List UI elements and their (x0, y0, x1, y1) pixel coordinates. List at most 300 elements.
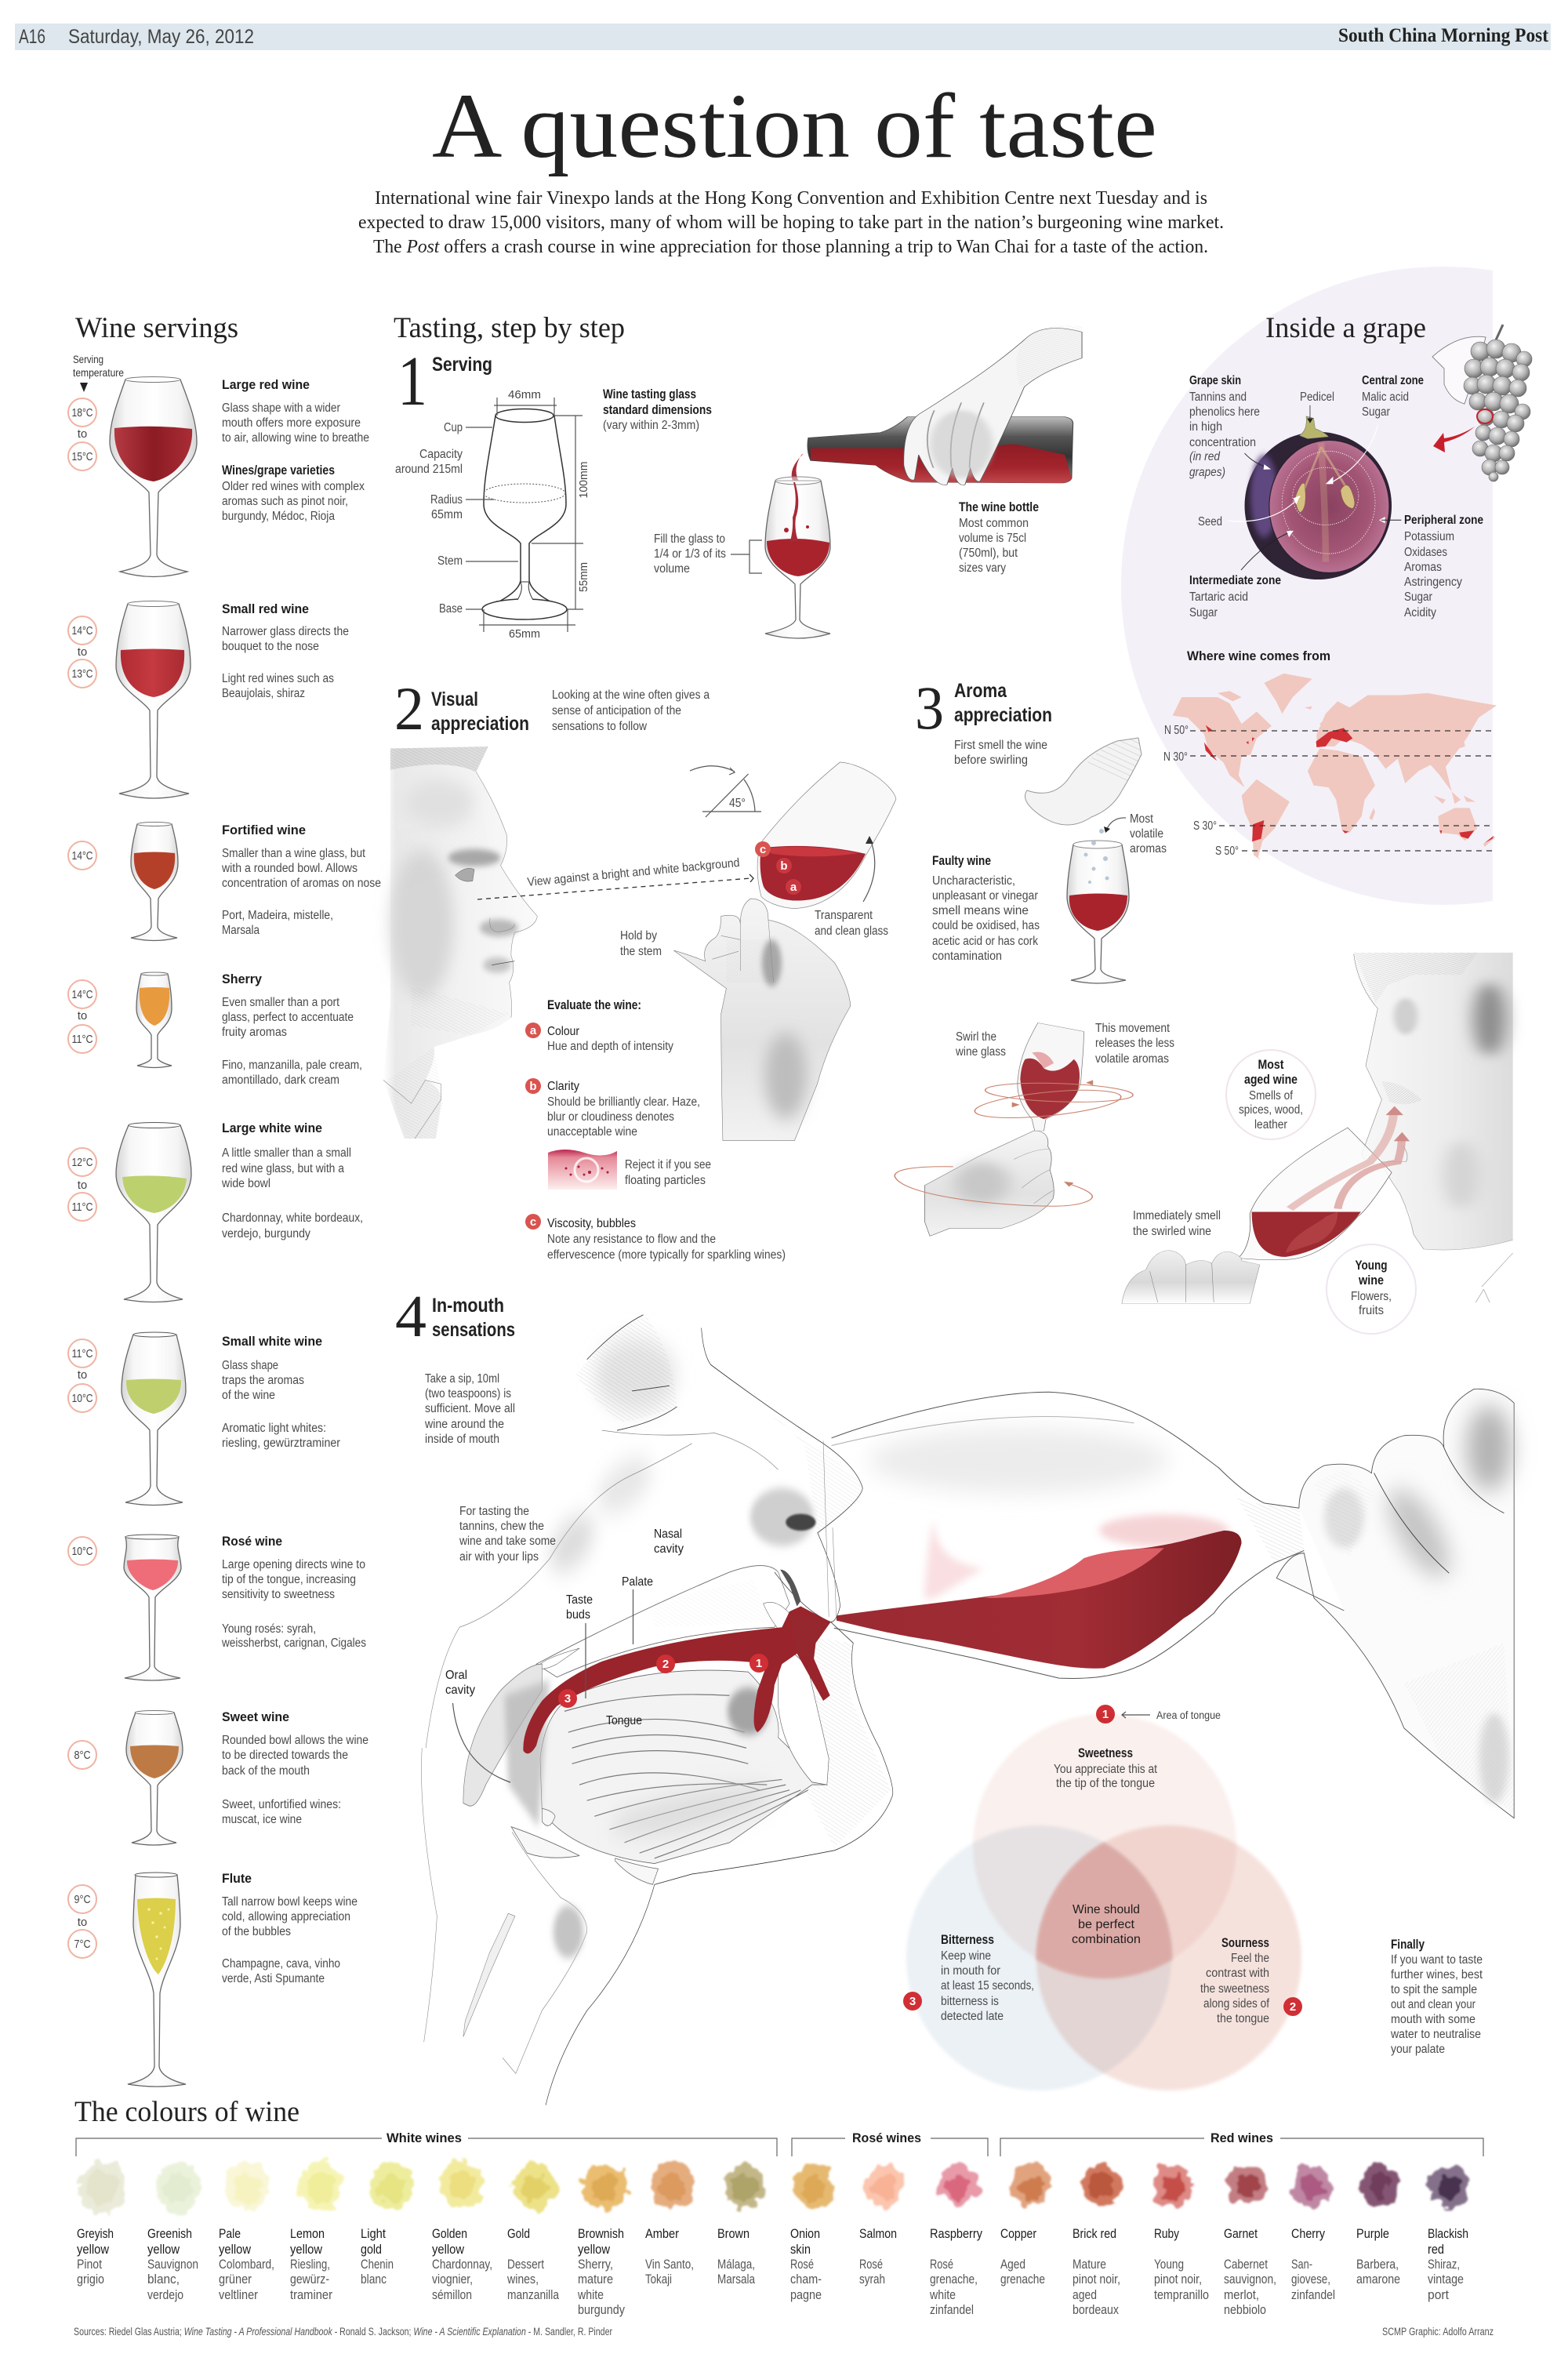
anatomy labels: Tongue (606, 1714, 642, 1727)
floating particles swatch (548, 1150, 617, 1190)
glass dimensions diagram: 46mm (508, 388, 541, 401)
serving: fortified wine: Smaller than a wine glass, but (222, 847, 366, 860)
venn text: sourness: the tongue (1217, 2012, 1269, 2025)
heading: wine servings: Wine servings (75, 312, 238, 344)
mouth number markers: 2 (662, 1658, 669, 1671)
evaluate the wine list: effervescence (more typically for sparkling wines) (547, 1248, 786, 1262)
serving: small red wine: Beaujolais, shiraz (222, 687, 305, 700)
illustration: swirling glass and hand (895, 1023, 1134, 1236)
serving: fortified wine (68, 822, 381, 941)
red wine colour labels: pinot noir, (1154, 2272, 1202, 2287)
serving: fortified wine: with a rounded bowl. Allows (221, 862, 358, 875)
venn text: sourness: Feel the (1231, 1952, 1269, 1965)
tannins note (459, 1505, 556, 1564)
serving: small white wine: Small white wine (222, 1335, 322, 1349)
callout: most aged wine (1226, 1050, 1316, 1139)
red wine colour labels: bordeaux (1073, 2302, 1119, 2317)
serving: flute: Tall narrow bowl keeps wine (222, 1895, 358, 1909)
illustration: nose over glass (1025, 738, 1142, 983)
finally note: further wines, best (1391, 1968, 1483, 1982)
serving: rose wine: weissherbst, carignan, Cigales (221, 1636, 366, 1650)
swirl notes: volatile aromas (1095, 1052, 1169, 1066)
area of tongue key: 1 (1102, 1708, 1109, 1721)
step 3: aroma appreciation: First smell the wine (954, 739, 1047, 752)
wine bottle note: Most common (959, 517, 1029, 530)
callout: young wine: Flowers, (1351, 1290, 1392, 1303)
glass dimensions diagram: 100mm (577, 461, 590, 499)
grape labels (1189, 374, 1483, 619)
white wine colour labels: verdejo (147, 2287, 183, 2302)
serving: large red wine: 15°C (72, 450, 93, 463)
white wine colour labels: yellow (578, 2242, 611, 2257)
illustration: grape cross-section (1228, 405, 1401, 579)
venn text: perfect combination: be perfect (1078, 1918, 1135, 1931)
glass standard dimensions note (603, 387, 712, 432)
callout: most aged wine: Smells of (1249, 1089, 1294, 1102)
venn text: perfect combination: combination (1072, 1933, 1141, 1946)
serving: sweet wine (68, 1710, 368, 1845)
white wine colour labels: Lemon (290, 2226, 325, 2241)
header bar: South China Morning Post (1338, 25, 1549, 46)
red wine colour labels: Cabernet (1224, 2257, 1268, 2272)
step 3: aroma appreciation: appreciation (954, 704, 1052, 726)
glass dimensions diagram: Radius (430, 493, 463, 507)
anatomy labels: Nasal (654, 1527, 682, 1541)
step 2: visual appreciation: Looking at the wine often gives a (552, 688, 710, 702)
serving: fortified wine: 14°C (72, 849, 93, 863)
serving: sweet wine: Sweet wine (222, 1710, 289, 1724)
venn text: sweetness: You appreciate this at (1054, 1763, 1158, 1776)
callout: most aged wine: Most (1258, 1058, 1284, 1072)
wine bottle note: volume is 75cl (959, 532, 1026, 545)
evaluate the wine list: blur or cloudiness denotes (547, 1110, 674, 1124)
white wine colour labels: Colombard, (219, 2257, 274, 2272)
grape labels: Aromas (1404, 561, 1442, 574)
illustration: hand holding tilted glass (673, 762, 896, 1141)
serving: small white wine: Glass shape (222, 1359, 278, 1372)
serving: fortified wine: concentration of aromas on nose (222, 877, 381, 890)
serving temperature key: Serving (73, 353, 103, 365)
serving: fortified wine: Port, Madeira, mistelle, (222, 909, 333, 922)
step 2: visual appreciation: sense of anticipation of the (552, 704, 681, 717)
evaluate the wine list: Should be brilliantly clear. Haze, (547, 1095, 700, 1109)
swirl notes: wine glass (955, 1045, 1006, 1059)
white wine colour labels: grigio (77, 2272, 104, 2287)
serving: small red wine: to (78, 645, 87, 659)
red wine colour labels: tempranillo (1154, 2287, 1209, 2302)
serving: fortified wine: Fortified wine (222, 823, 306, 837)
evaluate the wine list: Clarity (547, 1080, 579, 1093)
bracket: white wines (76, 2130, 777, 2156)
tannins note: air with your lips (459, 1550, 539, 1564)
white wine colour labels: Brown (717, 2226, 750, 2241)
red wine colour labels: vintage (1428, 2272, 1464, 2287)
grape labels: Potassium (1404, 530, 1454, 543)
mouth number markers: 3 (564, 1692, 571, 1705)
serving: small white wine: 11°C (72, 1347, 93, 1360)
white wine colour labels: Greyish (77, 2226, 114, 2241)
white wine colour labels: yellow (77, 2242, 110, 2257)
icon: red arrow (1433, 427, 1475, 452)
most volatile aromas note (1104, 812, 1167, 855)
serving: flute (68, 1872, 358, 2087)
arrow: transparent glass: and clean glass (815, 924, 888, 938)
serving: small white wine: Aromatic light whites: (222, 1422, 326, 1435)
red wine colour labels (1000, 2226, 1468, 2317)
red wine colour labels: amarone (1356, 2272, 1400, 2287)
swirl notes: Swirl the (956, 1030, 996, 1044)
fill bracket note (654, 532, 762, 576)
red wine colour labels: Copper (1000, 2226, 1036, 2241)
finally note: mouth with some (1391, 2013, 1475, 2026)
hold by the stem note: Hold by (620, 929, 657, 943)
immediately smell note (1133, 1209, 1221, 1238)
red wine colour labels: Cherry (1291, 2226, 1325, 2241)
evaluate the wine list (525, 998, 786, 1262)
serving: small white wine: traps the aromas (222, 1374, 304, 1387)
step 4: in-mouth sensations (395, 1284, 1514, 2105)
header bar: Saturday, May 26, 2012 (68, 26, 254, 48)
venn text: sourness: Sourness (1221, 1936, 1269, 1950)
rose wine colour labels: Salmon (859, 2226, 897, 2241)
red wine colour labels: Brick red (1073, 2226, 1116, 2241)
serving: small red wine: Narrower glass directs the (222, 625, 349, 638)
serving: large white wine: to (78, 1179, 87, 1192)
glass dimensions diagram: around 215ml (395, 463, 463, 476)
serving: flute: verde, Asti Spumante (222, 1972, 325, 1985)
most volatile aromas note: aromas (1130, 842, 1167, 855)
serving: small red wine: Small red wine (222, 602, 309, 616)
finally note (1390, 1938, 1483, 2056)
immediately smell note: Immediately smell (1133, 1209, 1221, 1222)
hold by the stem note (620, 929, 662, 958)
serving: large white wine: 11°C (72, 1201, 93, 1214)
arrow: transparent glass (815, 836, 888, 938)
panel: wine servings (68, 312, 381, 2087)
callout: young wine: Young (1355, 1259, 1388, 1273)
intro text: International wine fair Vinexpo lands at the Hong Kong Convention and Exhibition Centre next Tuesday and is (375, 188, 1207, 209)
most volatile aromas note: Most (1130, 812, 1154, 826)
rose wine colour labels: zinfandel (930, 2302, 974, 2317)
white wine colour labels: white (577, 2287, 604, 2302)
white wine colour labels: traminer (290, 2287, 332, 2302)
white wine colour labels: Vin Santo, (645, 2257, 694, 2272)
white wine colour labels: grüner (219, 2272, 252, 2287)
serving: large white wine: A little smaller than a small (222, 1146, 351, 1160)
grape labels: grapes) (1189, 466, 1225, 479)
white wine colour labels: Marsala (717, 2272, 755, 2287)
faulty wine note: contamination (932, 950, 1002, 963)
white wine colour labels: yellow (219, 2242, 252, 2257)
step 2: visual appreciation: sensations to follow (552, 720, 648, 733)
step 1: serving: 1 (397, 343, 427, 420)
red wine colour labels: San- (1291, 2257, 1312, 2272)
serving: large red wine: 18°C (72, 406, 93, 420)
red wine colour labels: giovese, (1291, 2272, 1330, 2287)
serving: sweet wine: to be directed towards the (222, 1749, 348, 1762)
white wine colour labels: mature (578, 2272, 613, 2287)
white wine colour labels: blanc, (147, 2272, 180, 2287)
faulty wine note: acetic acid or has cork (932, 935, 1038, 948)
area of tongue key: Area of tongue (1156, 1709, 1221, 1721)
step 2: visual appreciation (383, 674, 896, 1262)
bracket: red wines: Red wines (1210, 2130, 1273, 2145)
faulty wine note: smell means wine (932, 904, 1029, 917)
anatomy labels: Taste (566, 1593, 593, 1607)
serving: sweet wine: Sweet, unfortified wines: (222, 1798, 341, 1811)
glass dimensions diagram: Capacity (419, 448, 463, 461)
serving: sherry (68, 972, 362, 1087)
callout: most aged wine: aged wine (1244, 1073, 1298, 1087)
grape labels: Grape skin (1189, 374, 1241, 387)
rose wine colour labels: Raspberry (930, 2226, 982, 2241)
rose wine colour labels: white (929, 2287, 956, 2302)
serving: large red wine: Large red wine (222, 378, 310, 392)
wine bottle note: sizes vary (959, 561, 1006, 575)
bracket: rose wines (792, 2130, 988, 2156)
venn text: bitterness (903, 1933, 1034, 2023)
serving: flute: of the bubbles (222, 1925, 291, 1938)
glass dimensions diagram: 65mm (509, 627, 540, 641)
fill bracket note: Fill the glass to (654, 532, 725, 546)
white wine colour labels: manzanilla (507, 2287, 559, 2302)
grape labels: phenolics here (1189, 405, 1260, 419)
callout: most aged wine: leather (1254, 1118, 1287, 1132)
white wine colour labels: yellow (432, 2242, 465, 2257)
serving: sherry: fruity aromas (222, 1026, 287, 1039)
grape labels: Astringency (1404, 576, 1462, 589)
serving: flute: Champagne, cava, vinho (222, 1957, 340, 1971)
venn text: bitterness: in mouth for (941, 1964, 1000, 1978)
white wine colour labels: Golden (432, 2226, 467, 2241)
venn text: sourness: 2 (1290, 2000, 1296, 2014)
callout: young wine: fruits (1359, 1304, 1384, 1317)
hold by the stem note: the stem (620, 945, 662, 958)
white wine colour labels: blanc (361, 2272, 387, 2287)
serving: flute: 7°C (74, 1938, 91, 1951)
grape labels: Intermediate zone (1189, 574, 1281, 587)
venn diagram: taste areas (903, 1714, 1302, 2090)
serving: small red wine: bouquet to the nose (222, 640, 319, 653)
serving: rose wine: Young rosés: syrah, (222, 1622, 316, 1636)
serving: small white wine (68, 1332, 340, 1506)
grape labels: Sugar (1404, 590, 1432, 604)
serving: large white wine: 12°C (72, 1156, 93, 1169)
venn text: bitterness: bitterness is (941, 1995, 999, 2008)
intro text: The Post offers a crash course in wine appreciation for those planning a trip to Wan Chai for a taste of the action. (373, 237, 1208, 257)
step 4: in-mouth sensations: 4 (395, 1284, 426, 1349)
serving: small white wine: to (78, 1368, 87, 1382)
white wine colour labels: Riesling, (290, 2257, 330, 2272)
serving: small red wine (68, 601, 349, 798)
white wine colour labels: Chenin (361, 2257, 394, 2272)
rose wine colour labels: grenache, (930, 2272, 978, 2287)
grape labels: (in red (1189, 450, 1221, 463)
serving: sweet wine: back of the mouth (222, 1764, 310, 1778)
serving: large red wine: mouth offers more exposure (222, 416, 361, 430)
rose wine colour labels: skin (790, 2242, 811, 2257)
evaluate the wine list: floating particles (625, 1174, 706, 1187)
arrow: transparent glass: Transparent (815, 909, 873, 922)
grape labels: Malic acid (1362, 390, 1409, 404)
serving: sherry: Sherry (222, 972, 263, 986)
white wine colour labels: gewürz- (290, 2272, 329, 2287)
immediately smell note: the swirled wine (1133, 1225, 1211, 1238)
step 4: in-mouth sensations: sensations (432, 1319, 515, 1341)
venn text: bitterness: detected late (941, 2010, 1004, 2023)
serving: large red wine (68, 376, 369, 577)
venn text: sourness: along sides of (1203, 1997, 1270, 2011)
white wine colour labels: veltliner (219, 2287, 258, 2302)
bracket: rose wines: Rosé wines (852, 2130, 921, 2145)
serving: sherry: Fino, manzanilla, pale cream, (222, 1059, 362, 1072)
serving: small white wine: of the wine (222, 1389, 275, 1402)
wine bottle note: (750ml), but (959, 547, 1018, 560)
title: A question of taste (432, 74, 1157, 177)
serving: sherry: glass, perfect to accentuate (222, 1011, 354, 1024)
anatomy labels: Palate (622, 1575, 653, 1589)
rose wine colour labels: pagne (790, 2287, 822, 2302)
sources: Sources: Riedel Glas Austria; Wine Tasting - A Professional Handbook - Ronald S. Jackson; Wine - A Scientific Explanation - M. Sandler, R. Pinder (74, 2326, 612, 2337)
venn text: sweetness (1054, 1746, 1158, 1790)
red wine colour labels: pinot noir, (1073, 2272, 1120, 2287)
area of tongue key (1096, 1705, 1221, 1724)
finally note: your palate (1391, 2043, 1445, 2056)
tannins note: wine and take some (459, 1535, 556, 1548)
wine bottle note: The wine bottle (959, 500, 1039, 514)
swirl notes: releases the less (1095, 1037, 1174, 1050)
serving: sherry: to (78, 1009, 87, 1023)
white wine colour labels: Málaga, (717, 2257, 755, 2272)
evaluate the wine list: Colour (547, 1025, 579, 1038)
grape labels: Sugar (1362, 405, 1390, 419)
faulty wine note: unpleasant or vinegar (932, 889, 1038, 903)
grape labels: Sugar (1189, 606, 1218, 619)
anatomy labels: cavity (654, 1542, 684, 1556)
bracket: white wines: White wines (387, 2130, 462, 2145)
white wine colour labels: Pale (219, 2226, 241, 2241)
white wine colour labels: sémillon (432, 2287, 472, 2302)
glass dimensions diagram: 65mm (431, 508, 463, 521)
fill bracket note: volume (654, 562, 690, 576)
serving: rose wine: tip of the tongue, increasing (222, 1573, 356, 1586)
red wine colour labels: Garnet (1224, 2226, 1258, 2241)
red wine colour labels: Mature (1073, 2257, 1106, 2272)
sip note: inside of mouth (425, 1433, 499, 1446)
rose wine colour labels: Onion (790, 2226, 820, 2241)
serving: large white wine: Large white wine (222, 1121, 322, 1135)
anatomy labels: Oral (445, 1669, 467, 1682)
serving: large red wine: Glass shape with a wider (222, 401, 340, 415)
evaluate the wine list: Viscosity, bubbles (547, 1217, 636, 1230)
finally note: to spit the sample (1391, 1983, 1477, 1996)
mouth number markers (558, 1654, 768, 1708)
serving: sherry: Even smaller than a port (222, 996, 340, 1009)
rose wine colour labels: Rosé (859, 2257, 883, 2272)
white wine colour labels: Dessert (507, 2257, 544, 2272)
illustration: large tasting glass with wine and hand (832, 1389, 1514, 1818)
serving: flute: to (78, 1916, 87, 1929)
45 degree angle: 45° (729, 797, 746, 810)
view line: View against a bright and white background (527, 856, 740, 889)
venn text: bitterness: 3 (909, 1995, 916, 2008)
serving: sweet wine: muscat, ice wine (222, 1813, 302, 1826)
faulty wine note: Faulty wine (932, 854, 991, 868)
grape labels: Pedicel (1300, 390, 1334, 404)
step 2: visual appreciation: 2 (394, 674, 424, 743)
red wine colour labels: port (1428, 2287, 1449, 2302)
red wine colour labels: Blackish (1428, 2226, 1468, 2241)
world map: where wine comes from (1163, 649, 1497, 860)
rose wine colour labels: Rosé (930, 2257, 953, 2272)
serving: sherry: 11°C (72, 1033, 93, 1046)
glass dimensions diagram (395, 388, 590, 641)
evaluate the wine list: unacceptable wine (547, 1125, 637, 1139)
serving: large white wine: verdejo, burgundy (222, 1227, 310, 1240)
step 2: visual appreciation: Visual (431, 688, 478, 710)
finally note: Finally (1391, 1938, 1425, 1952)
white wine colour labels: yellow (147, 2242, 180, 2257)
illustration: bunch of grapes (1432, 325, 1532, 481)
step 2: visual appreciation: appreciation (431, 713, 529, 735)
venn text: sweetness: Sweetness (1078, 1746, 1133, 1760)
white wine colour labels (77, 2226, 755, 2317)
serving temperature key (73, 353, 124, 392)
sip note (424, 1372, 515, 1446)
world map: where wine comes from: N 30° (1163, 750, 1188, 764)
serving: small white wine: riesling, gewürztraminer (222, 1437, 340, 1450)
red wine colour labels: red (1428, 2242, 1444, 2257)
panel: the colours of wine (74, 2096, 1483, 2317)
grape labels: in high (1189, 420, 1222, 434)
header bar: A16 (19, 26, 45, 48)
anatomy labels (445, 1527, 684, 1782)
faulty wine note: could be oxidised, has (932, 919, 1040, 932)
evaluate the wine list: Note any resistance to flow and the (547, 1233, 716, 1246)
anatomy labels: cavity (445, 1684, 475, 1697)
white wine colour labels: Tokaji (645, 2272, 672, 2287)
white wine colour labels: burgundy (578, 2302, 625, 2317)
grape labels: Oxidases (1404, 546, 1447, 559)
step 1: serving (395, 325, 1082, 641)
step 3: aroma appreciation: Aroma (954, 680, 1007, 702)
glass standard dimensions note: standard dimensions (603, 403, 712, 417)
grape labels: Tannins and (1189, 390, 1247, 404)
evaluate the wine list: Evaluate the wine: (547, 998, 641, 1012)
callout: young wine: wine (1358, 1273, 1384, 1288)
colour swatches (78, 2161, 1468, 2214)
step 1: serving: Serving (432, 354, 492, 376)
panel: inside a grape (1163, 312, 1532, 860)
white wine colour labels: Sherry, (578, 2257, 613, 2272)
anatomy labels: buds (566, 1608, 590, 1622)
white wine colour labels: gold (361, 2242, 382, 2257)
red wine colour labels: merlot, (1224, 2287, 1259, 2302)
white wine colour labels: viognier, (432, 2272, 473, 2287)
white wine colour labels: wines, (506, 2272, 539, 2287)
serving: large white wine: wide bowl (221, 1177, 270, 1190)
step 3: aroma appreciation: before swirling (954, 754, 1028, 767)
serving: rose wine: Large opening directs wine to (222, 1558, 365, 1571)
header bar (15, 24, 1551, 50)
illustration: man smelling glass (1122, 953, 1513, 1304)
serving: sweet wine: Rounded bowl allows the wine (222, 1734, 368, 1747)
serving: large red wine: to air, allowing wine to breathe (222, 431, 369, 445)
evaluate the wine list: a (530, 1024, 537, 1037)
venn text: sourness (1200, 1936, 1302, 2025)
serving: large red wine: aromas such as pinot noir, (222, 495, 348, 508)
panel: inside a grape background circle (1121, 267, 1493, 905)
